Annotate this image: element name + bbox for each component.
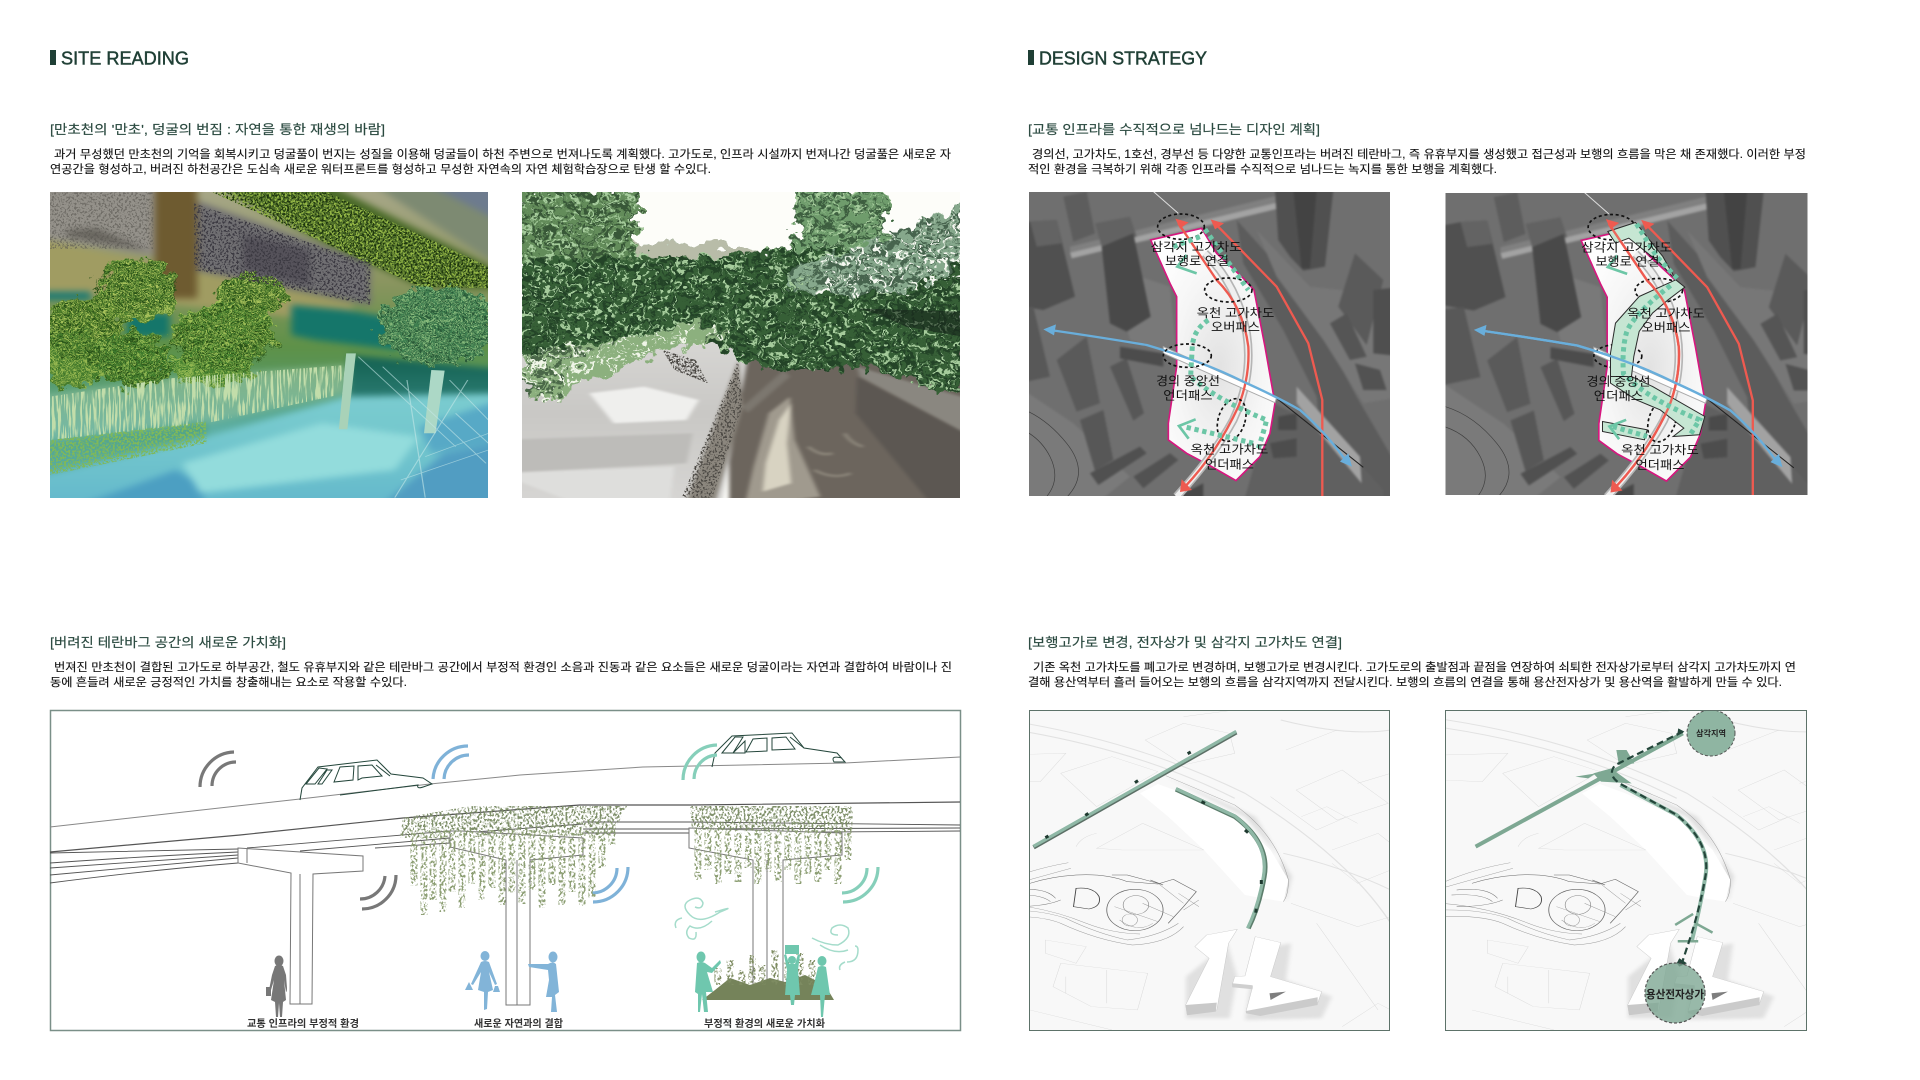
subheading: terrain vague value: [버려진 테란바그 공간의 새로운 가치화] (50, 635, 286, 650)
text block: vertical crossing description: 경의선, 고가차도, 1호선, 경부선 등 다양한 교통인프라는 버려진 테란바그, 즉 유휴부지를 생성했고 접근성과 보행의 흐름을 막은 채 존재했다. 이러한 부정 (1032, 147, 1806, 161)
silhouette: mint group of visitors (695, 945, 830, 1017)
text block: vertical crossing description (1028, 147, 1806, 176)
node: samgakji station: 삼각지역 (1696, 728, 1726, 738)
map labels, right map: 언더패스 (1635, 458, 1684, 472)
text block: terrain vague description: 번져진 만초천이 결합된 고가도로 하부공간, 철도 유휴부지와 같은 테란바그 공간에서 부정적 환경인 소음과 진동과 같은 요소들은 새로운 덩굴이라는 자연과 결합하여 바람이나 진 (54, 660, 952, 674)
heading: design strategy: DESIGN STRATEGY (1039, 48, 1207, 68)
map labels, left map: 언더패스 (1205, 457, 1254, 471)
map labels, right map: 삼각지 고가차도 (1581, 240, 1672, 254)
map labels, left map: 경의 중앙선 (1156, 374, 1220, 388)
green corridor zones (1602, 222, 1705, 440)
map labels, left map (1151, 240, 1274, 471)
caption: new value: 부정적 환경의 새로운 가치화 (704, 1017, 825, 1030)
map labels, left map: 옥천 고가차도 (1191, 442, 1268, 457)
silhouette: grey pedestrian (266, 956, 287, 1017)
node: yongsan electronics market: 용산전자상가 (1646, 987, 1704, 1001)
text block: vertical crossing description: 적인 환경을 극복하기 위해 각종 인프라를 수직적으로 넘나드는 녹지를 통한 보행을 계획했다. (1028, 162, 1497, 176)
vine canopy (516, 190, 966, 400)
node: samgakji station (1687, 710, 1735, 756)
map labels, left map: 옥천 고가차도 (1197, 305, 1274, 320)
map labels, right map: 언더패스 (1594, 389, 1643, 403)
map labels, left map: 오버패스 (1211, 320, 1260, 334)
green walkway network (1476, 728, 1713, 967)
trees and foliage texture (39, 258, 495, 390)
text block: pedestrian overpass description: 결해 용산역부터 흘러 들어오는 보행의 흐름을 삼각지역까지 전달시킨다. 보행의 흐름의 연결을 통해 용산전자상가 및 용산역을 활발하게 만들 수 있다. (1028, 675, 1782, 689)
map labels, left map: 삼각지 고가차도 (1151, 240, 1242, 254)
green viaduct segments (1034, 731, 1265, 928)
text block: vine spread description: 과거 무성했던 만초천의 기억을 회복시키고 덩굴풀이 번지는 성질을 이용해 덩굴들이 하천 주변으로 번져나도록 계획했다. 고가도로, 인프라 시설까지 번져나간 덩굴풀은 새로운 자 (54, 147, 951, 161)
viaduct structure (50, 757, 960, 1005)
silhouette: blue pedestrian pointing (528, 952, 559, 1012)
text block: pedestrian overpass description (1028, 660, 1796, 689)
map labels, right map: 옥천 고가차도 (1621, 442, 1699, 457)
photo: vines over concrete channel (522, 192, 960, 498)
subheading: vine spread: [만초천의 '만초', 덩굴의 번짐 : 자연을 통한 재생의 바람] (50, 122, 385, 137)
silhouette: blue pedestrian with bags (465, 951, 500, 1010)
hanging vines, right pier (690, 806, 853, 884)
text block: terrain vague description: 동에 흔들려 새로운 긍정적인 가치를 창출해내는 요소로 작용할 수있다. (50, 676, 407, 689)
map: green crossings planned over infrastructure (1446, 193, 1808, 495)
subheading: vertical crossing plan: [교통 인프라를 수직적으로 넘나드는 디자인 계획] (1028, 122, 1320, 137)
plan frame, right (1446, 710, 1806, 1030)
car, right (712, 733, 845, 767)
caption: combination with nature: 새로운 자연과의 결합 (474, 1017, 563, 1030)
text block: vine spread description: 연공간을 형성하고, 버려진 하천공간은 도심속 새로운 워터프론트를 형성하고 무성한 자연속의 자연 체험학습장으로 탄생 할 수있다. (50, 162, 711, 176)
photo: overgrown viaduct over blue stream (50, 192, 488, 498)
sound waves, blue (433, 746, 628, 902)
map labels, left map: 보행로 연결 (1165, 253, 1229, 268)
text block: terrain vague description (50, 660, 952, 689)
map labels, right map: 경의 중앙선 (1586, 374, 1650, 388)
plan: existing overpass in green (1030, 711, 1389, 1030)
map labels, left map: 언더패스 (1163, 388, 1213, 402)
text block: pedestrian overpass description: 기존 옥천 고가차도를 폐고가로 변경하며, 보행고가로 변경시킨다. 고가도로의 출발점과 끝점을 연장하여 쇠퇴한 전자상가로부터 삼각지 고가차도까지 연 (1033, 660, 1796, 674)
sound waves, grey (200, 752, 396, 909)
mint pedestrian flow, right map (1608, 224, 1699, 439)
map labels, right map: 보행로 연결 (1595, 253, 1659, 268)
node: yongsan electronics market (1645, 963, 1705, 1023)
sound waves, mint (683, 745, 878, 902)
subheading: pedestrian overpass connection: [보행고가로 변경, 전자상가 및 삼각지 고가차도 연결] (1028, 635, 1342, 650)
caption: negative infrastructure: 교통 인프라의 부정적 환경 (247, 1017, 359, 1030)
hanging vines, middle pier (400, 806, 627, 915)
grass at pier base (702, 950, 834, 1000)
car, left (300, 760, 432, 800)
map: existing infrastructure with pedestrian crossings (1029, 192, 1390, 496)
panel: viaduct section diagram (50, 710, 960, 1030)
mint pedestrian flow, left map (1173, 229, 1267, 448)
map labels, right map: 옥천 고가차도 (1627, 305, 1705, 320)
wind swirls (675, 898, 858, 970)
plan: pedestrian route linking Yongsan electronics market and Samgakji (1446, 711, 1806, 1030)
map labels, right map: 오버패스 (1641, 320, 1690, 334)
text block: vine spread description (50, 147, 951, 176)
plan frame, left (1030, 710, 1390, 1030)
map labels, right map (1581, 240, 1705, 472)
heading: site reading: SITE READING (61, 48, 189, 68)
